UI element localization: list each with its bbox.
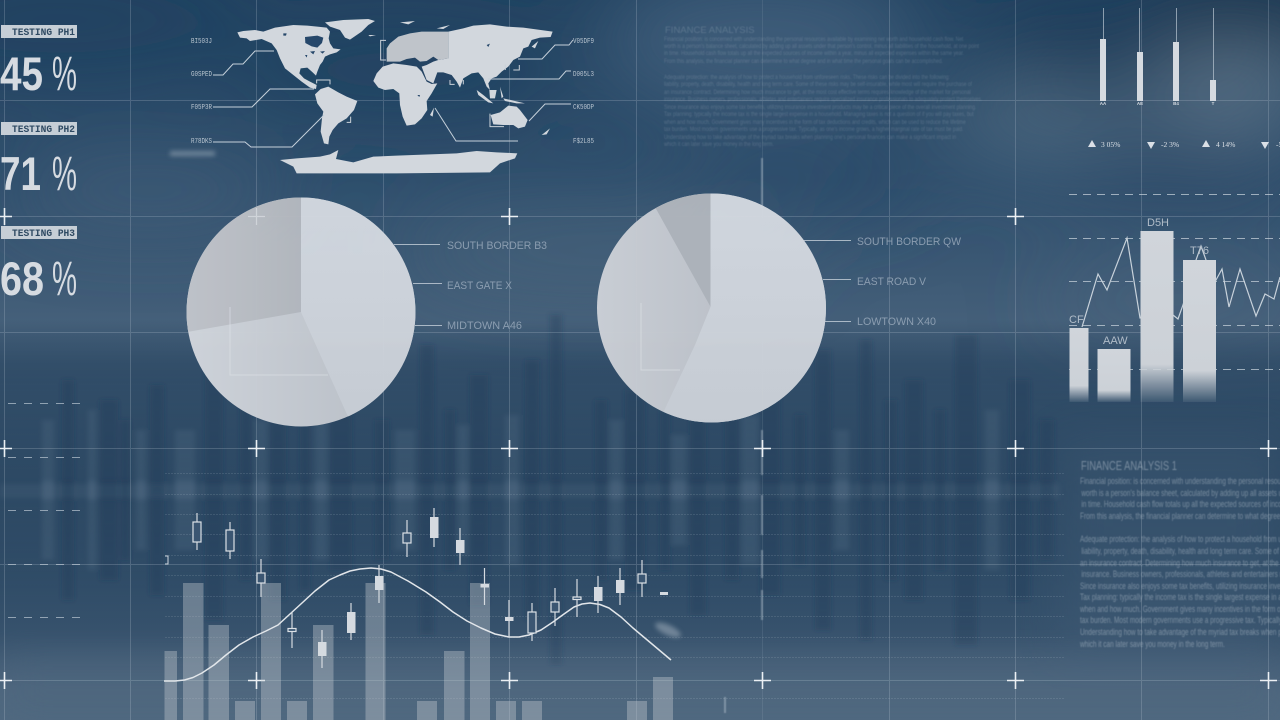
pie 2 legend [804,236,962,328]
testing phase 1: TESTING PH1 [12,27,75,39]
panel: world map [191,19,594,173]
smooth curve [164,568,671,681]
map labels: F$2L85 [573,138,594,146]
panel: finance analysis top text: when and how much. Government gives many incentives in the form of tax deductions and credits, which can be used to reduce the lifetime [663,120,966,126]
left dashed guide lines [8,404,82,618]
plus markers [0,208,1277,689]
testing phase 2: 71 [0,147,41,200]
testing phase 1 [0,25,77,101]
pie 1 legend [394,240,547,332]
pie chart 2 [597,194,826,422]
testing phase 3: % [52,253,77,306]
indicator: up 3.05 [1088,140,1120,149]
panel: finance analysis right text: FINANCE ANALYSIS 1 [1081,460,1177,473]
dashed guides [1069,194,1280,370]
panel: finance analysis top text: From this analysis, the financial planner can determine to what degree and in what time the personal goals can be accomplished. [664,59,943,65]
bars [1070,231,1216,402]
panel: finance analysis top text: Adequate protection: the analysis of how to protect a household from unforeseen risks. These risks can be divided into the following: [664,75,950,81]
map labels: R78DKS [191,138,212,146]
panel: top right candlestick bars: AA [1100,101,1107,106]
map labels: CK50DP [573,104,594,112]
panel: finance analysis top text: which it can later save you money in the long term. [663,142,774,148]
map labels [191,38,594,146]
panel: top right candlestick bars [1100,8,1216,106]
panel: finance analysis top text: Financial position: is concerned with understanding the personal resources available by examining net worth and household cash flow. Net [664,37,964,43]
panel: finance analysis top text: worth is a person's balance sheet, calculated by adding up all assets under that person's control, minus all liabilities of the household, at one point [663,44,979,50]
testing phase 1: 45 [0,47,43,100]
map labels: F05P3R [191,104,213,112]
pie 2 legend: SOUTH BORDER QW [857,236,962,248]
panel: bottom bar, curve and candlestick chart [164,508,673,720]
panel: finance analysis top text [663,25,983,148]
pie 1 legend: MIDTOWN A46 [447,320,522,332]
map labels: D005L3 [573,71,594,79]
pie 2 legend: EAST ROAD V [857,276,927,288]
bar labels [1069,217,1209,347]
pie 1 legend: EAST GATE X [447,280,513,292]
panel: finance analysis top text: an insurance contract. Determining how much insurance to get, at the most cost effective terms requires knowledge of the market for personal [664,90,971,96]
testing phase 3: TESTING PH3 [12,228,75,240]
leader lines [213,40,573,147]
bars [164,583,673,720]
filled candles [318,517,668,656]
panel: finance analysis top text: FINANCE ANALYSIS [665,25,755,36]
map labels: BI503J [191,38,212,46]
testing phase 2 [0,122,77,201]
panel: top right candlestick bars: T [1212,101,1215,106]
panel: top right candlestick bars: B4 [1173,101,1179,106]
testing phase 3: 68 [0,252,44,305]
hollow candles [193,522,646,633]
panel: right bar and line chart [1069,194,1280,402]
panel: finance analysis top text: Tax planning: typically the income tax is the single largest expense in a household. Managing taxes is not a question of if you will pay taxes, but [664,112,974,118]
indicator: down 5 [1261,140,1280,149]
map continents [237,19,553,173]
panel: top right change indicators [1088,140,1280,149]
panel: top right candlestick bars: AE [1137,101,1143,106]
panel: finance analysis top text: insurance. Business owners, professionals, athletes and entertainers require specialized insurance professionals to adequately protect themselves. [664,97,983,103]
indicator: down 2.3: -2 3% [1161,140,1179,149]
indicator: down 2.3 [1147,140,1179,149]
pie 2 slices [597,194,826,422]
testing phase 1: % [52,48,77,101]
panel: finance analysis top text: liability, property, death, disability, health and long term care. Some of these risks may be self-insurable, while most will require the purchase of [664,82,972,88]
pie chart 1 [186,198,416,426]
bar labels: CF [1069,314,1084,326]
bar labels: AAW [1103,335,1128,347]
panel: finance analysis top text: Understanding how to take advantage of the myriad tax breaks when planning one's personal finances can make a significant impact in [664,135,956,141]
panel: finance analysis right text: which it can later save you money in the long term. [1079,639,1225,649]
map labels: G0SPED [191,71,212,79]
bar labels: D5H [1147,217,1169,229]
blurred vertical accent segments [724,158,763,713]
testing phase 2: TESTING PH2 [12,124,75,136]
indicator: up 3.05: 3 05% [1101,140,1120,149]
testing phase 2: % [52,148,77,201]
testing phase 3 [0,226,77,306]
panel: testing percentages [0,25,77,306]
panel: finance analysis right text [1079,460,1280,649]
small bracket [165,556,168,564]
indicator: up 4.14: 4 14% [1216,140,1235,149]
bar labels: T76 [1190,245,1209,257]
map region brackets [317,40,519,127]
panel: finance analysis top text: Since insurance also enjoys some tax benefits, utilizing insurance investment products may be a critical piece of the overall investment planning. [664,105,977,111]
pie 2 legend: LOWTOWN X40 [857,316,936,328]
map labels: V05DF9 [573,38,594,46]
panel: finance analysis top text: in time. Household cash flow totals up all the expected sources of income within a year, minus all expected expenses within the same year. [664,51,964,57]
blurred smudges [170,151,683,640]
candle wicks [197,508,642,668]
pie 1 slices [186,198,416,426]
line series [1082,238,1280,327]
pie 1 legend: SOUTH BORDER B3 [447,240,547,252]
indicator: up 4.14 [1202,140,1235,149]
panel: finance analysis top text: tax burden. Most modern governments use a progressive tax. Typically, as one's income grows, a higher marginal rate of tax must be paid. [664,127,964,133]
